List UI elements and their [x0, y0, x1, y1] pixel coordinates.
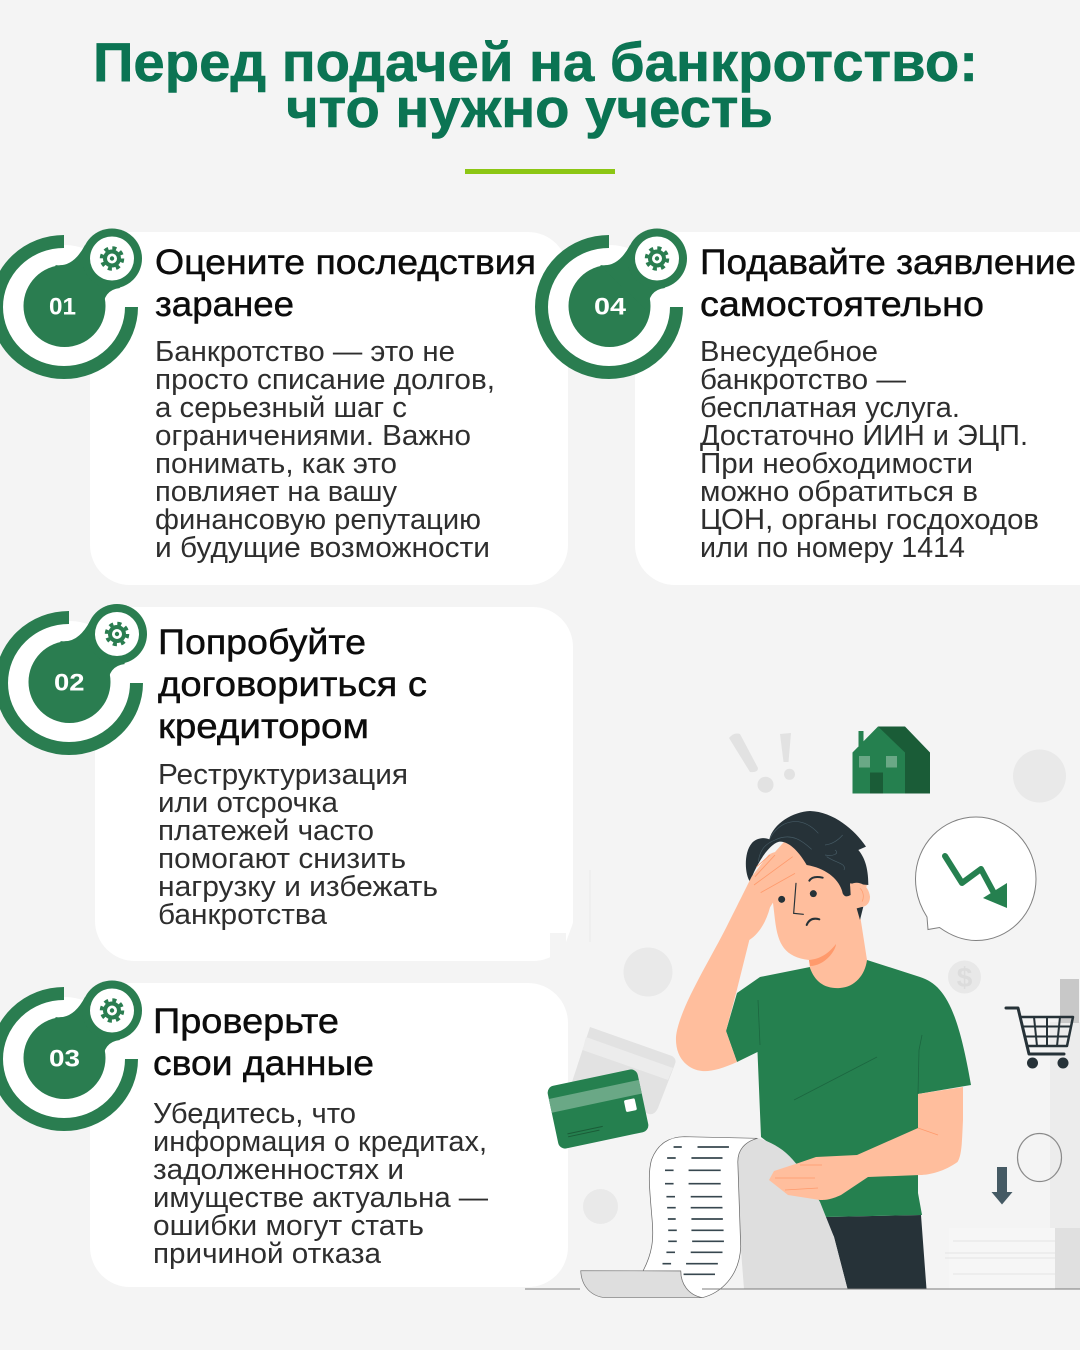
faint vertical line: [589, 870, 591, 942]
body text: ограничениями. Важно: [155, 420, 471, 452]
title underline accent: [465, 169, 615, 174]
heading: [155, 243, 536, 324]
facial features: [778, 877, 823, 925]
card background: [90, 232, 568, 585]
title: что нужно учесть: [286, 77, 773, 139]
panel 03: check your data: [0, 980, 568, 1287]
heading: Подавайте заявление: [700, 243, 1076, 282]
body text: [153, 1098, 489, 1270]
man: t-shirt: [726, 960, 971, 1217]
body text: повлияет на вашу: [155, 476, 398, 508]
floor line: [525, 1288, 1080, 1290]
badge 01: [0, 228, 142, 372]
card background: [635, 232, 1080, 585]
panel 02: negotiate with the creditor: [2, 604, 576, 963]
credit cards: [546, 1027, 676, 1150]
body text: нагрузку и избежать: [158, 871, 438, 903]
down arrow: [992, 1167, 1012, 1204]
body text: При необходимости: [700, 448, 973, 480]
dollar coin: [948, 960, 981, 994]
receipt: white paper, lines and curl: [581, 1137, 757, 1298]
receipt: grey back: [738, 1138, 848, 1289]
body text: причиной отказа: [153, 1238, 381, 1270]
heading: свои данные: [153, 1044, 374, 1083]
heading: самостоятельно: [700, 285, 984, 324]
body text: Достаточно ИИН и ЭЦП.: [700, 420, 1028, 452]
icon: shopping cart: [1006, 1008, 1073, 1068]
body text: Убедитесь, что: [153, 1098, 356, 1130]
decorative grey circles: [583, 750, 1066, 1224]
badge 04: [542, 228, 687, 372]
body text: и будущие возможности: [155, 532, 490, 564]
body text: Внесудебное: [700, 336, 878, 368]
badge 04: 04: [594, 294, 627, 320]
dollar coin: $: [957, 962, 973, 993]
hair highlights: [758, 822, 844, 870]
icon: house: [852, 726, 930, 794]
heading: Проверьте: [153, 1002, 339, 1041]
badge 02: 02: [54, 670, 84, 696]
body text: [155, 336, 495, 564]
title: [93, 31, 978, 139]
hair: [746, 811, 868, 920]
illustration: worried man with bill: [525, 726, 1080, 1298]
card corner notch: [550, 923, 576, 963]
background blocks on the right: [945, 979, 1080, 1289]
man: neck and face: [768, 835, 868, 988]
badge 03: [0, 980, 142, 1124]
body text: ошибки могут стать: [153, 1210, 424, 1242]
body text: банкротства: [158, 899, 327, 931]
body text: или по номеру 1414: [700, 532, 965, 564]
body text: информация о кредитах,: [153, 1126, 487, 1158]
heading: договориться с: [158, 665, 427, 704]
badge 01: 01: [49, 294, 76, 320]
body text: ЦОН, органы госдоходов: [700, 504, 1039, 536]
outlined circle: [1018, 1134, 1062, 1182]
panel 04: file the application yourself: [542, 228, 1080, 585]
man: lower arm and hand: [769, 1087, 963, 1200]
man: hair, ear, features and raised arm: [676, 811, 870, 1071]
card background: [90, 983, 568, 1287]
body text: платежей часто: [158, 815, 374, 847]
body text: просто списание долгов,: [155, 364, 495, 396]
body text: Реструктуризация: [158, 759, 408, 791]
heading: [700, 243, 1076, 324]
body text: Банкротство — это не: [155, 336, 455, 368]
badge 02: [2, 604, 147, 748]
heading: Попробуйте: [158, 623, 366, 662]
body text: можно обратиться в: [700, 476, 978, 508]
body text: [158, 759, 438, 931]
man: shirt creases: [758, 1000, 922, 1100]
hand lines: [775, 1128, 938, 1190]
panel 01: assess consequences: [0, 228, 568, 585]
body text: или отсрочка: [158, 787, 338, 819]
body text: финансовую репутацию: [155, 504, 481, 536]
title: Перед подачей на банкротство:: [93, 31, 978, 93]
body text: задолженностях и: [153, 1154, 404, 1186]
body text: банкротство —: [700, 364, 907, 396]
speech bubble with falling arrow: [916, 817, 1036, 940]
heading: [153, 1002, 374, 1083]
body text: имуществе актуальна —: [153, 1182, 489, 1214]
body text: бесплатная услуга.: [700, 392, 960, 424]
heading: Оцените последствия: [155, 243, 536, 282]
body text: понимать, как это: [155, 448, 397, 480]
badge 03: 03: [49, 1046, 80, 1072]
finger lines: [754, 855, 795, 893]
card background: [95, 607, 573, 961]
body text: а серьезный шаг с: [155, 392, 407, 424]
ear line: [860, 888, 863, 902]
exclamation marks: [729, 733, 795, 793]
raised arm and hand: [676, 852, 796, 1071]
man: pants: [825, 1215, 926, 1289]
ear: [850, 883, 870, 907]
body text: [700, 336, 1039, 564]
body text: помогают снизить: [158, 843, 406, 875]
heading: кредитором: [158, 707, 369, 746]
heading: заранее: [155, 285, 294, 324]
heading: [158, 623, 427, 746]
man: chin shadow: [809, 944, 836, 966]
